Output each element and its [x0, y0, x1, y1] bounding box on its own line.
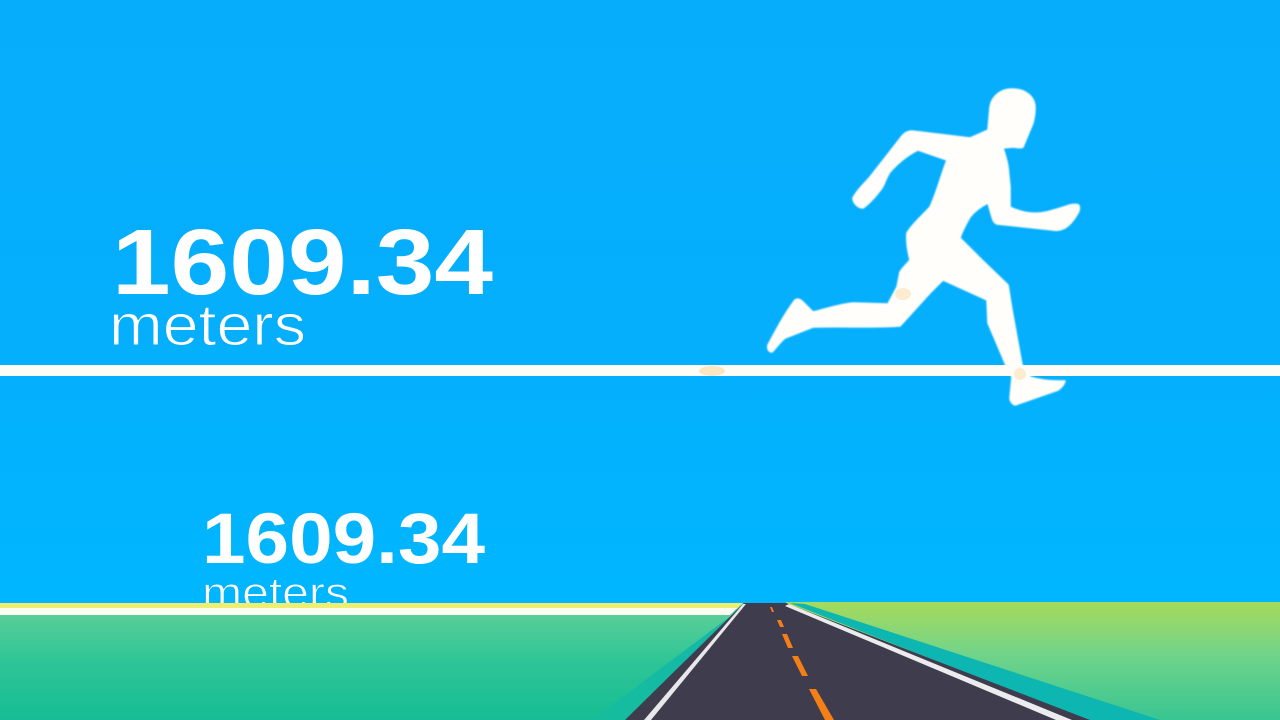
upper track line	[0, 365, 1280, 376]
right teal shoulder	[790, 603, 1160, 720]
track line tint	[699, 366, 725, 376]
small unit label, partly hidden by the ground: meters	[202, 569, 349, 617]
horizon yellow stripe	[0, 603, 743, 609]
large distance value: 1609.34	[112, 210, 493, 314]
road with shoulders and markings	[592, 603, 1160, 720]
right grass field	[786, 602, 1280, 720]
small distance value: 1609.34	[202, 500, 486, 579]
asphalt	[625, 603, 1090, 720]
ankle tint	[1014, 368, 1026, 380]
left teal shoulder	[592, 603, 742, 720]
left grass field	[0, 604, 760, 720]
knee tint	[895, 288, 911, 300]
runner silhouette	[768, 89, 1079, 405]
left edge line	[644, 604, 746, 720]
right edge line	[785, 604, 1072, 720]
centre dashes	[770, 607, 834, 720]
large unit label: meters	[109, 293, 306, 358]
horizon white stripe	[0, 608, 737, 615]
